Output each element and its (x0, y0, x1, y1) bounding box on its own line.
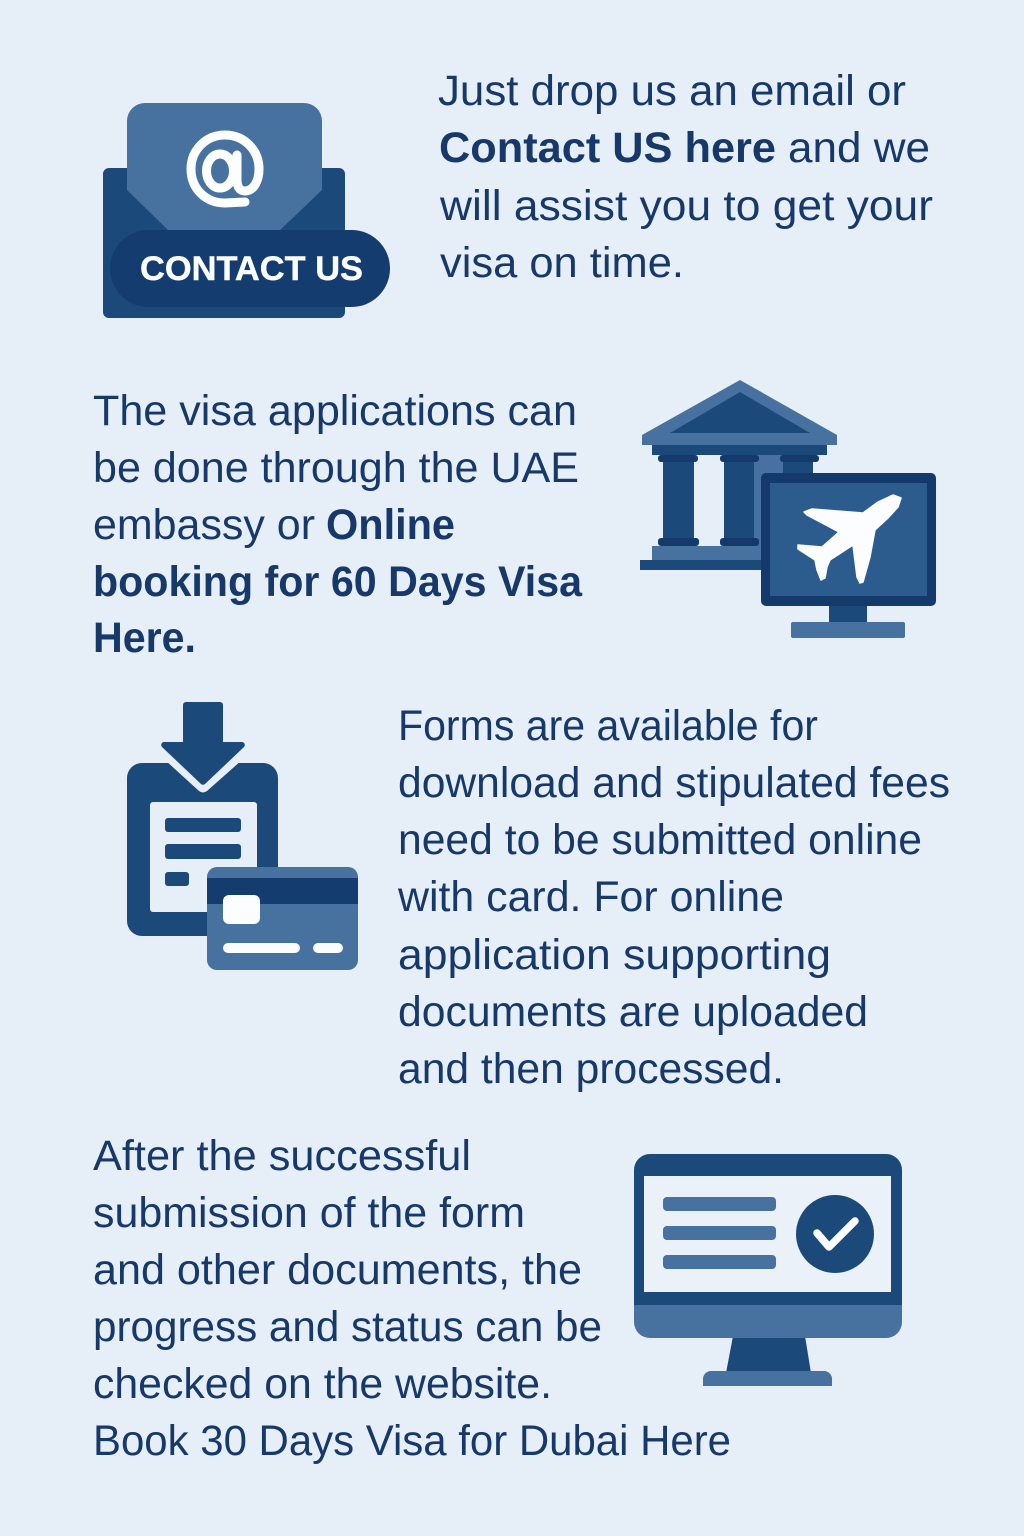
card stripe (207, 878, 358, 904)
text block: forms and fees: download and stipulated fees (398, 759, 950, 807)
airplane (798, 495, 901, 583)
text block: status check: Book 30 Days Visa for Dubai Here (93, 1417, 731, 1465)
screen (644, 1176, 891, 1292)
text block: embassy or online: booking for 60 Days Visa (93, 558, 583, 606)
text block: status check: and other documents, the (93, 1246, 582, 1294)
roof (642, 380, 837, 445)
clipboard (127, 763, 278, 936)
beam (652, 445, 827, 455)
text block: embassy or online: The visa applications can (93, 387, 577, 435)
monitor stand (726, 1336, 811, 1373)
icon: status monitor (634, 1154, 902, 1386)
text block: embassy or online: be done through the UAE (93, 444, 579, 492)
form lines (165, 818, 241, 886)
wall between columns (753, 455, 783, 546)
paper (150, 802, 257, 912)
text block: embassy or online: Here. (93, 614, 196, 662)
text block: forms and fees (397, 702, 950, 1093)
monitor chin (634, 1300, 902, 1338)
text block: forms and fees: need to be submitted online (398, 816, 922, 864)
status lines (663, 1197, 776, 1269)
check mark (817, 1221, 855, 1247)
text block: status check: submission of the form (93, 1189, 525, 1237)
monitor frame (634, 1154, 902, 1305)
text block: forms and fees: and then processed. (398, 1045, 784, 1093)
text block: embassy or online: embassy or (93, 501, 315, 549)
text block: forms and fees: application supporting (398, 931, 831, 979)
letter with at sign (127, 103, 322, 232)
clipboard notch (165, 760, 242, 792)
text block: status check: progress and status can be (93, 1303, 602, 1351)
stand base (703, 1371, 832, 1386)
text block: contact: Contact US here (439, 124, 776, 172)
text block: contact: and we (788, 124, 930, 172)
check badge (796, 1195, 874, 1273)
contact us pill (110, 230, 390, 307)
text block: embassy or online (93, 387, 583, 662)
steps (652, 546, 772, 560)
text block: contact (438, 67, 933, 287)
text block: status check: checked on the website. (93, 1360, 552, 1408)
columns (663, 460, 813, 540)
monitor (761, 473, 936, 606)
text block: contact: Just drop us an email or (438, 67, 906, 115)
text block: forms and fees: documents are uploaded (398, 988, 868, 1036)
text block: forms and fees: Forms are available for (398, 702, 818, 750)
download arrow (161, 702, 245, 785)
text block: contact: will assist you to get your (439, 182, 933, 230)
column capitals and bases (658, 455, 819, 546)
envelope body (103, 168, 345, 318)
icon: embassy and plane monitor (640, 380, 936, 638)
credit card (207, 867, 358, 970)
at sign (191, 135, 259, 203)
text block: contact: visa on time. (440, 239, 684, 287)
icon: contact us envelope (103, 103, 390, 318)
text block: status check (93, 1132, 731, 1465)
icon: form download and card (127, 702, 358, 970)
card chip (223, 895, 260, 924)
text block: embassy or online: Online (326, 501, 455, 549)
pill label: CONTACT US (140, 250, 363, 288)
card number lines (223, 943, 300, 953)
text block: forms and fees: with card. For online (397, 873, 784, 921)
pediment (670, 392, 810, 433)
monitor stand (829, 604, 867, 624)
text block: status check: After the successful (93, 1132, 471, 1180)
